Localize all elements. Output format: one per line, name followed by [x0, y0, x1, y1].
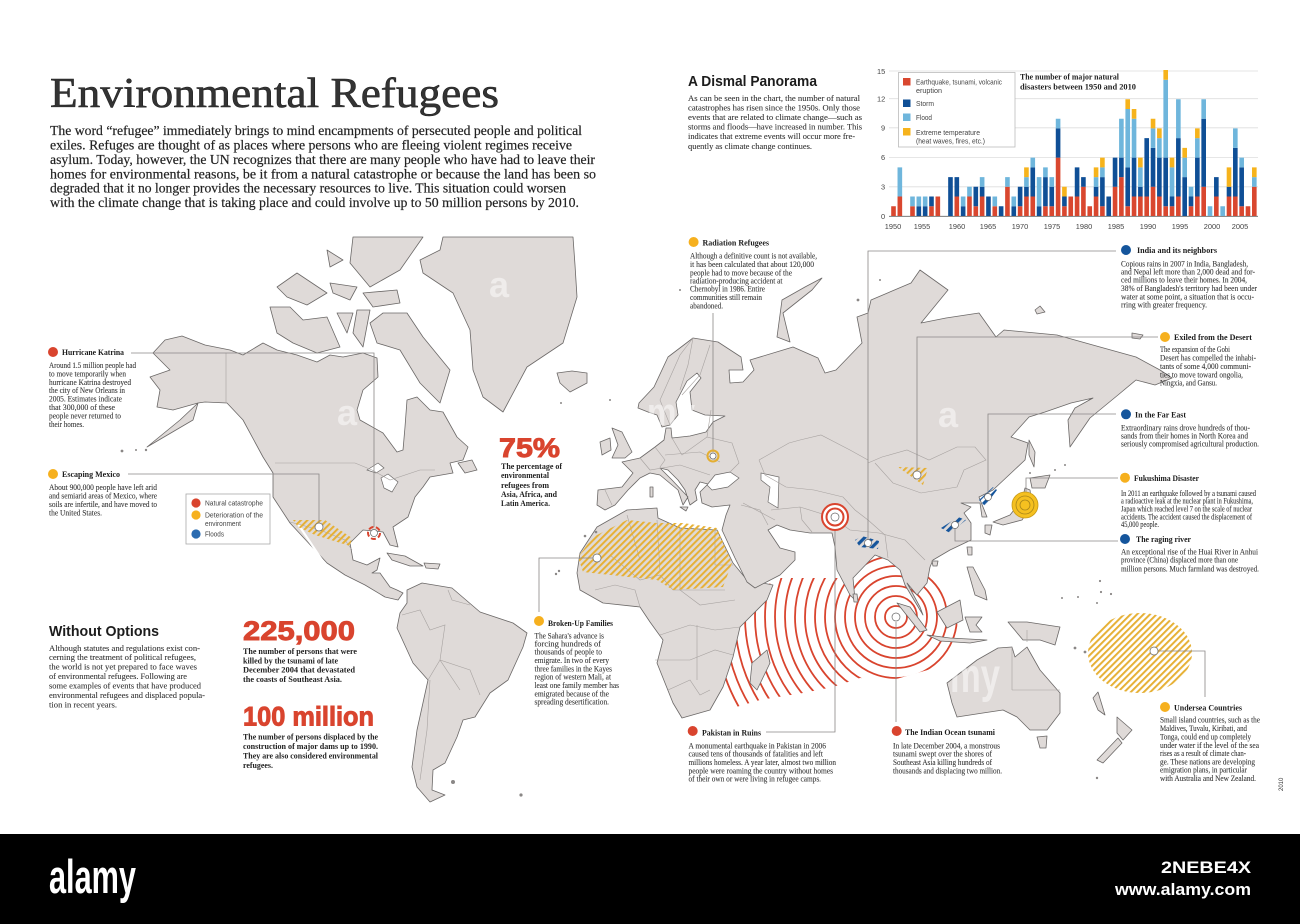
chart legend: Extreme temperature [916, 128, 980, 137]
callout: India and its neighbors: rring with greater frequency. [1121, 301, 1207, 310]
callout: Fukushima Disaster: accidents. The accident caused the displacement of [1121, 512, 1252, 521]
callout: Fukushima Disaster: 45,000 people. [1121, 520, 1159, 529]
panel: Without Options [49, 623, 205, 710]
callout: Exiled from the Desert: The expansion of the Gobi [1160, 345, 1231, 354]
y axis labels: 12 [877, 94, 885, 104]
panel: A Dismal Panorama [688, 73, 862, 151]
callout: The Indian Ocean tsunami: The Indian Ocean tsunami [905, 727, 995, 737]
x axis labels: 2000 [1204, 222, 1220, 231]
floods hatch: China [941, 517, 966, 533]
European and Asian islands [600, 278, 1143, 715]
chart legend: Flood [916, 113, 932, 122]
callout: 75% statistic: environmental [501, 471, 550, 480]
callout: India and its neighbors: ced millions to leave their homes. In 2004, [1121, 276, 1247, 285]
chart legend: (heat waves, fires, etc.) [916, 136, 985, 146]
text block: of environmental refugees. Following are [49, 672, 187, 681]
callout: Broken-Up Families: emigrated because of the [534, 689, 609, 698]
callout: The Indian Ocean tsunami: thousands and displacing two million. [893, 766, 1002, 775]
callout: Undersea Countries: Maldives, Tuvalu, Kiribati, and [1160, 724, 1247, 733]
Tasmania [1037, 736, 1047, 748]
callout: Broken-Up Families: thousands of people to [534, 648, 602, 657]
callout: Radiation Refugees: people had to move because of the [690, 268, 792, 277]
map legend: Floods [205, 530, 224, 538]
callout: In the Far East: Extraordinary rains drove hundreds of thou- [1121, 423, 1250, 432]
callout: Hurricane Katrina: to move temporarily when [49, 369, 126, 378]
Madagascar [750, 650, 770, 690]
Greenland [420, 237, 577, 412]
callout: Broken-Up Families: least one family member has [534, 681, 619, 690]
watermark: a [337, 392, 358, 433]
callout: 225,000 statistic: killed by the tsunami of late [243, 656, 338, 665]
callout: Hurricane Katrina: hurricane Katrina destroyed [49, 378, 131, 387]
Iceland [557, 371, 587, 392]
callout: 100 million statistic: The number of persons displaced by the [243, 733, 378, 742]
callout: Escaping Mexico [48, 469, 157, 517]
Great Lakes [367, 463, 384, 473]
callout: 100 million statistic [243, 702, 379, 770]
callout: India and its neighbors: and Nepal left more than 2,000 dead and for- [1121, 268, 1255, 277]
callout: The raging river [1120, 534, 1259, 574]
callout: Fukushima Disaster: Fukushima Disaster [1134, 473, 1199, 483]
callout: 75% statistic: 75% [499, 433, 560, 463]
callout: Hurricane Katrina: that 300,000 of these [49, 403, 115, 412]
callout: 225,000 statistic: December 2004 that devastated [243, 666, 355, 675]
text block: some examples of events that have produced [49, 682, 201, 690]
callout: 100 million statistic: They are also considered environmental [243, 752, 379, 761]
callout: Hurricane Katrina: their homes. [49, 420, 84, 429]
callout: Pakistan in Ruins: millions homeless. A year later, almost two million [688, 758, 836, 767]
callout: Broken-Up Families: emigrate. In two of every [534, 656, 610, 665]
intro paragraph: homes for environmental reasons, be it from a natural catastrophe or because the land has been so [50, 166, 596, 182]
callout: The Indian Ocean tsunami: In late December 2004, a monstrous [893, 741, 1000, 750]
callout: Escaping Mexico: soils are infertile, and have moved to [49, 500, 157, 509]
Pacific islands hatch [1088, 613, 1192, 693]
heading: A Dismal Panorama [688, 73, 818, 90]
map legend: Natural catastrophe [205, 498, 263, 508]
callout: Broken-Up Families: region of western Mali, at [534, 673, 612, 682]
Sahara desertification hatch [578, 520, 732, 590]
callout: Fukushima Disaster: In 2011 an earthquake followed by a tsunami caused [1121, 489, 1256, 498]
watermark: my [950, 650, 1000, 703]
Black Sea [707, 472, 739, 490]
watermark: a [489, 264, 510, 305]
callout: Broken-Up Families: spreading desertification. [534, 698, 609, 707]
callout: Exiled from the Desert [1160, 332, 1256, 387]
text block: tion in recent years. [49, 700, 117, 710]
chart legend [898, 72, 1015, 147]
y axis labels: 15 [877, 67, 885, 76]
callout: Escaping Mexico: About 900,000 people have left arid [49, 483, 157, 492]
map: tsunami wave rings [726, 557, 958, 707]
North America [147, 336, 468, 600]
callout: India and its neighbors [1121, 245, 1257, 310]
text block: environmental refugees and displaced popula- [49, 691, 205, 700]
callout: 225,000 statistic: the coasts of Southeast Asia. [243, 675, 342, 684]
callout: The raging river: The raging river [1136, 534, 1191, 544]
floods hatch: India [855, 536, 879, 549]
callout: Fukushima Disaster: a radioactive leak at the nuclear plant in Fukushima, [1121, 497, 1253, 506]
callout: Undersea Countries: under water if the level of the sea [1160, 741, 1259, 750]
callout: Exiled from the Desert: Exiled from the Desert [1174, 332, 1252, 342]
floods hatch: Korea [979, 487, 997, 506]
text block: Although statutes and regulations exist con- [49, 644, 200, 653]
x axis labels [885, 222, 1248, 231]
callout: 100 million statistic: refugees. [243, 761, 273, 770]
callout: In the Far East [1121, 409, 1259, 449]
Africa [577, 508, 773, 718]
x axis labels: 1965 [980, 222, 996, 231]
x axis labels: 1960 [949, 222, 965, 231]
x axis labels: 1990 [1140, 222, 1156, 231]
callout: Radiation Refugees: communities still remain [690, 293, 762, 302]
text block: indicates that extreme events will occur more fre- [688, 132, 855, 141]
text block [49, 644, 205, 710]
intro paragraph: exiles. Refuges are thought of as places where persons who are fleeing violent regimes receive [50, 138, 572, 152]
x axis labels: 1995 [1172, 222, 1188, 231]
Australia [947, 647, 1060, 730]
callout: Undersea Countries: ge. These nations are developing [1160, 757, 1255, 766]
callout: Undersea Countries: Tonga, could end up completely [1160, 733, 1252, 742]
callout: India and its neighbors: Copious rains in 2007 in India, Bangladesh, [1121, 259, 1248, 268]
watermark: a [938, 394, 959, 435]
callout: Exiled from the Desert: Ningxia, and Gansu. [1160, 378, 1217, 387]
chart title: The number of major natural [1020, 72, 1120, 82]
callout: 75% statistic [499, 433, 562, 508]
callout: 225,000 statistic: 225,000 [243, 616, 355, 646]
text block: quently as climate change continues. [688, 142, 812, 151]
marker: Fukushima rings [1012, 492, 1038, 518]
callout: Radiation Refugees: it has been calculated that about 120,000 [690, 260, 814, 269]
text block: the world is not yet prepared to face waves [49, 662, 197, 672]
Mongolia hatch [898, 467, 928, 485]
x axis labels: 1985 [1108, 222, 1124, 231]
chart title: disasters between 1950 and 2010 [1020, 82, 1136, 92]
callout: Pakistan in Ruins: of their own or were living in refugee camps. [688, 775, 821, 784]
callout: In the Far East: sands from their homes in North Korea and [1121, 432, 1248, 441]
callout: India and its neighbors: water at some point, a situation that is occu- [1121, 292, 1254, 301]
text block: storms and floods—have increased in number. This [688, 122, 862, 132]
callout: 100 million statistic: construction of major dams up to 1990. [243, 742, 378, 751]
year credit: 2010 [1279, 777, 1285, 791]
map legend: Deterioration of the [205, 510, 263, 520]
grid lines [889, 71, 1258, 187]
callout: 100 million statistic: 100 million [243, 702, 374, 732]
x axis labels: 1950 [885, 222, 901, 231]
callout: Radiation Refugees: Chernobyl in 1986. Entire [690, 285, 765, 294]
callout: Undersea Countries: rises as a result of climate chan- [1160, 749, 1246, 758]
callout: Hurricane Katrina: people never returned to [49, 411, 121, 420]
callout: Radiation Refugees: Radiation Refugees [702, 238, 770, 248]
callout: Radiation Refugees: radiation-producing accident at [690, 277, 783, 286]
x axis labels: 1970 [1012, 222, 1028, 231]
callout: India and its neighbors: 38% of Bangladesh's territory had been under [1121, 284, 1257, 293]
text block [688, 94, 862, 151]
chart legend: Earthquake, tsunami, volcanic [916, 78, 1002, 86]
callout: Exiled from the Desert: Desert has compelled the inhabi- [1160, 353, 1256, 362]
marker: Chernobyl [708, 450, 718, 462]
text block: events that are related to climate change—such as [688, 113, 862, 122]
callout: The Indian Ocean tsunami: Southeast Asia killing hundreds of [893, 758, 992, 767]
callout: Exiled from the Desert: tants of some 4,000 communi- [1160, 362, 1251, 371]
marker: Pakistan earthquake rings [822, 504, 848, 530]
callout: In the Far East: seriously compromised agricultural production. [1121, 440, 1259, 449]
callout: 225,000 statistic [243, 616, 357, 684]
intro paragraph: The word “refugee” immediately brings to mind encampments of persecuted people and political [50, 123, 582, 138]
callout: Pakistan in Ruins: A monumental earthquake in Pakistan in 2006 [688, 741, 826, 750]
callout: Broken-Up Families [534, 616, 619, 707]
x axis labels: 2005 [1232, 222, 1248, 231]
chart legend: eruption [916, 86, 942, 95]
callout: Escaping Mexico: Escaping Mexico [62, 469, 121, 479]
callout: 75% statistic: The percentage of [501, 462, 562, 471]
callout: Exiled from the Desert: ties to move toward ongolia, [1160, 370, 1243, 379]
text block: catastrophes has risen since the 1950s. Only those [688, 103, 860, 112]
callout: Pakistan in Ruins: people were roaming the country without homes [688, 766, 833, 775]
callout: Escaping Mexico: the United States. [49, 508, 102, 517]
callout: Undersea Countries: Undersea Countries [1174, 703, 1243, 713]
image id: 2NEBE4X [1161, 858, 1252, 877]
callout: Broken-Up Families: forcing hundreds of [534, 639, 601, 648]
callout: Hurricane Katrina: 2005. Estimates indicate [49, 395, 122, 404]
title: Environmental Refugees [50, 71, 499, 117]
callout: The raging river: An exceptional rise of the Huai River in Anhui [1121, 547, 1259, 556]
callout: Fukushima Disaster [1120, 473, 1256, 529]
callout: The raging river: province (China) displaced more than one [1121, 556, 1238, 565]
callout: Undersea Countries [1160, 702, 1260, 783]
callout: Fukushima Disaster: Japan which reached level 7 on the scale of nuclear [1121, 505, 1252, 514]
callout: Hurricane Katrina: Hurricane Katrina [62, 347, 125, 357]
callout: Undersea Countries: Small island countries, such as the [1160, 716, 1260, 725]
intro paragraph: with the climate change that is taking place and could involve up to 50 million persons by 2010. [50, 195, 579, 210]
Caspian Sea [761, 473, 779, 508]
intro paragraph: asylum. Today, however, the UN recognizes that there are many people who have had to leave their [50, 152, 596, 167]
callout: Hurricane Katrina: the city of New Orleans in [49, 386, 125, 395]
callout: India and its neighbors: India and its neighbors [1137, 245, 1218, 255]
callout: Hurricane Katrina: Around 1.5 million people had [49, 361, 136, 370]
text block: cerning the treatment of political refugees, [49, 653, 196, 662]
national borders [226, 338, 1060, 780]
callout: In the Far East: In the Far East [1135, 409, 1186, 419]
Arctic islands [270, 237, 477, 569]
x axis labels: 1980 [1076, 222, 1092, 231]
callout: Hurricane Katrina [48, 347, 136, 429]
callout: Undersea Countries: emigration plans, in particular [1160, 766, 1247, 775]
site url: www.alamy.com [1114, 880, 1251, 899]
callout: Radiation Refugees: Although a definitive count is not available, [690, 252, 817, 261]
Baja gulf [298, 524, 322, 560]
heading: Without Options [49, 623, 159, 640]
callout: Broken-Up Families: three families in the Kayes [534, 664, 612, 673]
y axis labels: 0 [881, 212, 885, 221]
chart legend: Storm [916, 99, 934, 108]
callout: Radiation Refugees [689, 237, 817, 310]
South America [397, 583, 527, 802]
callout: The raging river: million persons. Much farmland was destroyed. [1121, 565, 1259, 574]
location markers [315, 471, 1158, 655]
Mexico hatch [293, 520, 352, 546]
callout: Broken-Up Families: Broken-Up Families [548, 618, 613, 628]
callout: Undersea Countries: with Australia and New Zealand. [1160, 774, 1256, 783]
y axis labels [877, 67, 885, 221]
callout: The Indian Ocean tsunami: tsunami swept over the shores of [893, 750, 992, 759]
map legend [186, 494, 270, 544]
intro paragraph [50, 123, 596, 210]
chart title [1020, 72, 1136, 92]
callout: 75% statistic: Latin America. [501, 499, 550, 508]
callout: Radiation Refugees: abandoned. [690, 301, 723, 310]
callout: Broken-Up Families: The Sahara's advance is [534, 631, 604, 640]
small islands [121, 279, 1112, 797]
watermark [337, 264, 1000, 703]
stacked bars [891, 70, 1257, 216]
x axis labels: 1975 [1044, 222, 1060, 231]
alamy logo: alamy [49, 850, 136, 903]
callout: The Indian Ocean tsunami [892, 726, 1002, 775]
marker: Katrina [368, 527, 380, 539]
callout: 75% statistic: refugees from [501, 481, 549, 490]
callout: Escaping Mexico: and semiarid areas of Mexico, where [49, 492, 157, 501]
callout: 75% statistic: Asia, Africa, and [501, 490, 557, 499]
New Zealand [1097, 717, 1132, 763]
y axis labels: 9 [881, 124, 885, 132]
callout: Pakistan in Ruins: caused tens of thousands of fatalities and left [688, 750, 824, 759]
world map [121, 237, 1192, 802]
callout: 225,000 statistic: The number of persons that were [243, 647, 357, 656]
map legend: environment [205, 519, 241, 528]
leader lines [128, 251, 1205, 732]
intro paragraph: degraded that it no longer provides the necessary resources to live. This situation could worsen [50, 180, 566, 196]
callout: Pakistan in Ruins [688, 726, 836, 784]
bar chart: major natural disasters 1950-2010 [877, 67, 1258, 231]
watermark: my [647, 392, 695, 434]
text block: As can be seen in the chart, the number of natural [688, 94, 861, 103]
y axis labels: 3 [881, 182, 885, 192]
footer band [0, 834, 1300, 924]
x axis labels: 1955 [914, 222, 930, 231]
Eurasia [597, 270, 1172, 615]
y axis labels: 6 [881, 153, 885, 162]
callout: Pakistan in Ruins: Pakistan in Ruins [702, 728, 762, 738]
